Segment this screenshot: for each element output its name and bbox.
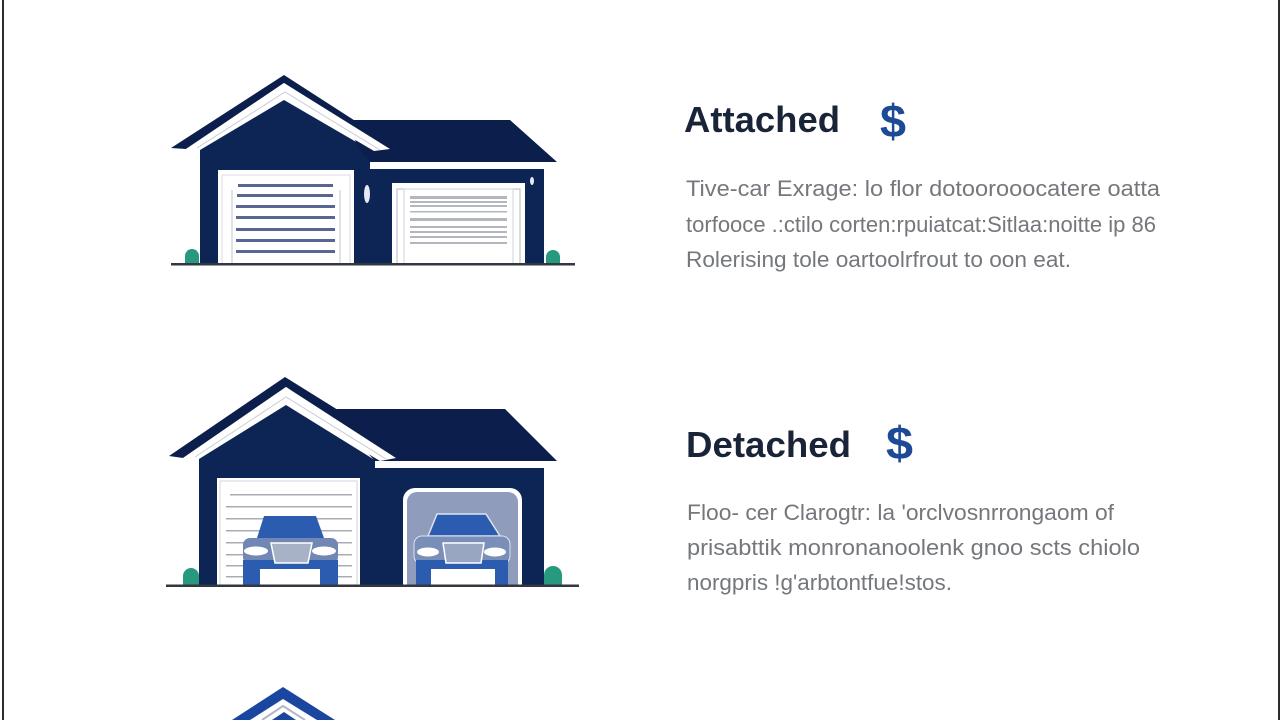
- detached: gable roof: [169, 377, 396, 461]
- attached: shrubs: [185, 249, 560, 264]
- detached: side roof trim: [375, 461, 545, 468]
- attached: gable roof: [171, 75, 390, 151]
- attached: side roof: [345, 120, 557, 162]
- description: detached: [687, 500, 1140, 595]
- detached: side roof: [325, 409, 557, 461]
- icon: dollar sign: $: [880, 95, 906, 147]
- detached: right garage door with car: [403, 488, 522, 585]
- attached: building body: [200, 100, 544, 264]
- description: detached: norgpris !g'arbtontfue!stos.: [687, 570, 952, 595]
- car: right: [414, 514, 510, 585]
- detached: ground line: [166, 584, 579, 587]
- description: attached: Rolerising tole oartoolrfrout to oon eat.: [686, 247, 1071, 272]
- attached: side roof trim: [370, 163, 555, 169]
- description: detached: Floo- cer Clarogtr: la 'orclvosnrrongaom of: [687, 500, 1115, 525]
- detached: shrubs: [183, 566, 562, 585]
- description: detached: prisabttik monronanoolenk gnoo scts chiolo: [687, 535, 1140, 560]
- attached: left garage door: [218, 170, 354, 264]
- attached: ground line: [171, 263, 575, 266]
- description: attached: torfooce .:ctilo corten:rpuiatcat:Sitlaa:noitte ip 86: [686, 212, 1156, 237]
- heading: attached: Attached: [684, 99, 840, 140]
- detached: building body: [199, 405, 544, 585]
- panel: third garage roof, cropped at page edge: [232, 687, 335, 720]
- heading: detached: Detached: [686, 424, 851, 465]
- panel: attached garage illustration: [171, 75, 575, 266]
- description: attached: Tive-car Exrage: lo flor dotoorooocatere oatta: [686, 176, 1161, 201]
- icon: dollar sign: $: [886, 417, 913, 469]
- car: left: [243, 516, 338, 585]
- description: attached: [686, 176, 1161, 272]
- attached: wall lights: [364, 177, 534, 203]
- panel: attached text: [684, 95, 1161, 272]
- panel: detached garage illustration: [166, 377, 579, 587]
- panel: detached text: [686, 417, 1140, 595]
- detached: left garage door with car: [217, 478, 360, 585]
- attached: right garage door: [392, 183, 525, 264]
